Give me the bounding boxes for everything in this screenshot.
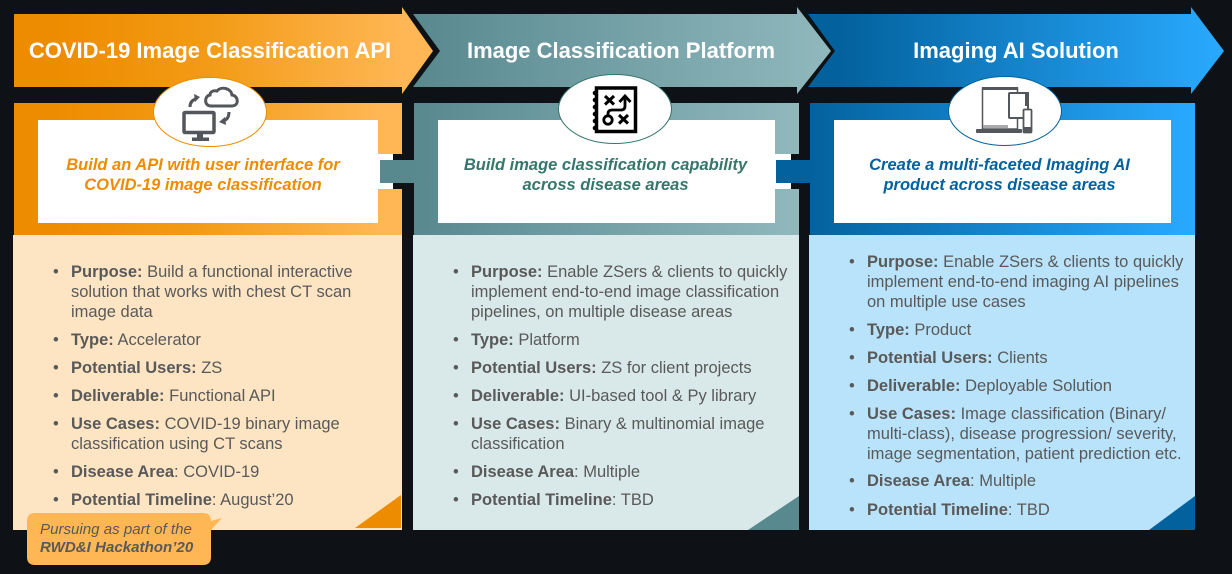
goal text: Create a multi-faceted Imaging AI (869, 156, 1130, 174)
details list: Potential Users: ZS for client projects (471, 359, 752, 377)
details list: multi-class), disease progression/ severity, (867, 425, 1177, 443)
goal text (464, 156, 748, 194)
connector: API to platform (378, 154, 414, 189)
details list: Potential Timeline: August’20 (71, 491, 294, 509)
panel: Imaging AI Solution (809, 76, 1195, 530)
details list: pipelines, on multiple disease areas (471, 303, 732, 321)
icon: laptop, tablet and phone (948, 76, 1062, 146)
details list: implement end-to-end image classification (471, 283, 779, 301)
teal header band (414, 103, 799, 235)
details list: Type: Accelerator (71, 331, 201, 349)
details list: solution that works with chest CT scan (71, 283, 351, 301)
details list: Potential Timeline: TBD (867, 501, 1050, 519)
goal text: product across disease areas (883, 176, 1116, 194)
icon: cloud and monitor (153, 77, 267, 147)
details list: Deliverable: Functional API (71, 387, 276, 405)
goal text: Build image classification capability (464, 156, 747, 174)
details list: implement end-to-end imaging AI pipelines (867, 273, 1179, 291)
details list: Type: Platform (471, 331, 580, 349)
details list: Use Cases: COVID-19 binary image (71, 415, 340, 433)
details list: Disease Area: Multiple (867, 472, 1036, 490)
arrow: Imaging AI Solution (808, 7, 1224, 94)
callout: hackathon note (27, 513, 222, 565)
details list: Deliverable: UI-based tool & Py library (471, 387, 756, 405)
details list: Use Cases: Image classification (Binary/ (867, 405, 1166, 423)
panel: COVID-19 API (13, 77, 402, 530)
details list: Purpose: Enable ZSers & clients to quickly (867, 253, 1183, 271)
details panel (413, 235, 799, 530)
orange header band (14, 103, 402, 235)
heading: Imaging AI Solution: Imaging AI Solution (913, 38, 1119, 63)
corner triangle (1149, 496, 1195, 530)
details list: Disease Area: COVID-19 (71, 463, 259, 481)
corner triangle (748, 496, 799, 530)
heading: Image Classification Platform: Image Classification Platform (467, 38, 775, 63)
blue header band (810, 103, 1195, 235)
panel: Image Classification Platform (413, 74, 799, 530)
details list: image data (71, 303, 153, 321)
goal text: across disease areas (522, 176, 689, 194)
corner triangle (355, 495, 401, 528)
goal text: Build an API with user interface for (66, 156, 340, 174)
white goal box (38, 120, 378, 223)
goal text (869, 156, 1130, 194)
white goal box (834, 120, 1171, 223)
details list: Purpose: Build a functional interactive (71, 263, 353, 281)
details list: Potential Users: ZS (71, 359, 222, 377)
callout: hackathon note: RWD&I Hackathon’20 (40, 539, 193, 556)
heading: COVID-19 Image Classification API: COVID-19 Image Classification API (29, 38, 391, 63)
details list: Potential Users: Clients (867, 349, 1048, 367)
details list: Disease Area: Multiple (471, 463, 640, 481)
details panel (809, 235, 1195, 530)
arrow: COVID-19 Image Classification API (14, 7, 433, 94)
goal text (66, 156, 340, 194)
details list: Type: Product (867, 321, 971, 339)
goal text: COVID-19 image classification (84, 176, 322, 194)
details list (454, 263, 788, 509)
details list: Purpose: Enable ZSers & clients to quickly (471, 263, 787, 281)
details list: Potential Timeline: TBD (471, 491, 654, 509)
details list: classification using CT scans (71, 435, 283, 453)
details list: classification (471, 435, 565, 453)
details list: Use Cases: Binary & multinomial image (471, 415, 764, 433)
details list: Deliverable: Deployable Solution (867, 377, 1112, 395)
icon: strategy notebook (558, 74, 672, 144)
details list: image segmentation, patient prediction etc. (867, 445, 1182, 463)
details list: on multiple use cases (867, 293, 1026, 311)
white goal box (438, 120, 775, 223)
details panel (13, 235, 402, 530)
callout: hackathon note: Pursuing as part of the (40, 521, 192, 538)
connector: platform to solution (775, 154, 810, 189)
arrow: Image Classification Platform (413, 7, 831, 94)
details list (54, 263, 353, 509)
